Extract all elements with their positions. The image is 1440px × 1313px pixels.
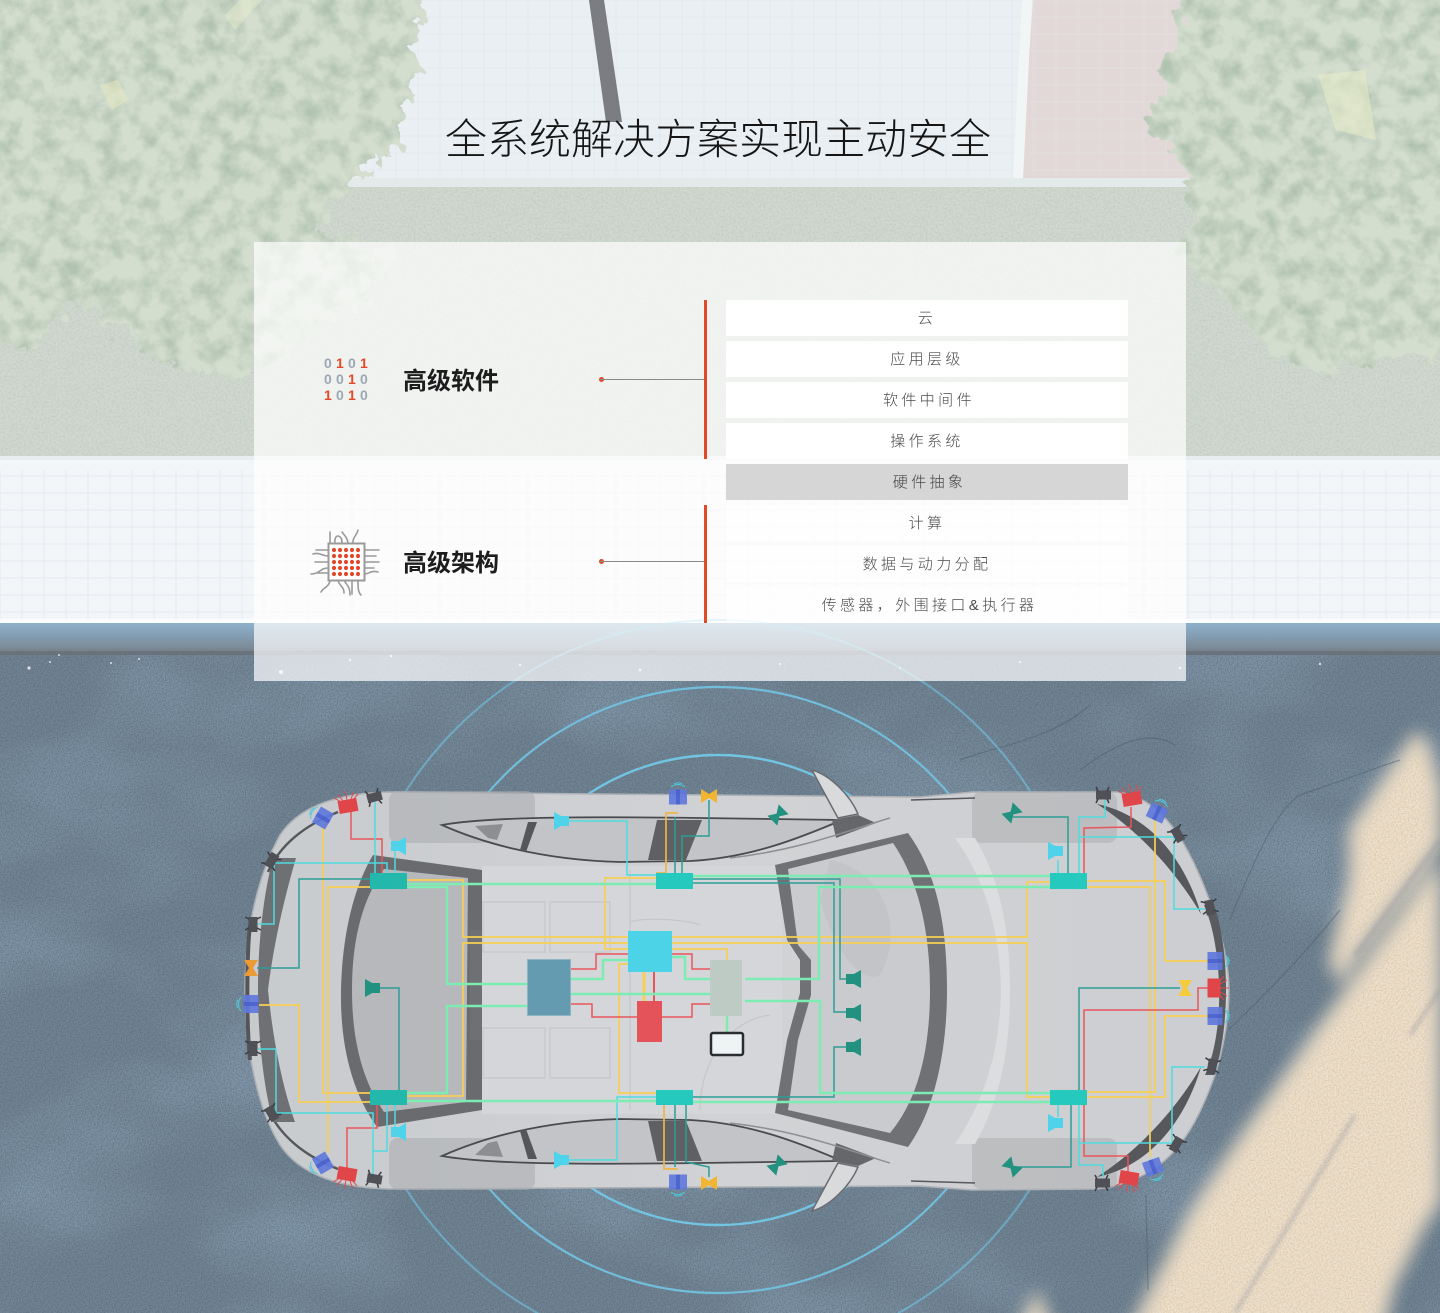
radar sensors [237, 783, 1229, 1196]
lower tiles [0, 460, 1440, 624]
display screen [711, 1033, 743, 1055]
sun patches [1015, 731, 1440, 1313]
heading: advanced architecture: 高级架构 [403, 550, 499, 577]
left tree [0, 0, 421, 378]
row: hardware abstraction: 硬件抽象 [893, 474, 966, 491]
upper paved area [0, 0, 1440, 186]
curb [0, 623, 1440, 655]
grass [0, 187, 1440, 459]
cameras [245, 787, 1221, 1191]
right tree [1150, 0, 1440, 372]
central compute: grey-green module [710, 960, 742, 1016]
signal rings [348, 620, 1088, 1313]
bracket: software [704, 300, 707, 459]
row: software middleware: 软件中间件 [883, 392, 975, 409]
car details: wheels, windows, mirrors [247, 770, 1226, 1211]
shadow streaks on sun patch [1235, 840, 1440, 1313]
zone control modules [370, 873, 1087, 1105]
row: compute [726, 505, 1128, 541]
connector: software [599, 377, 704, 382]
wiring: green data [407, 876, 1050, 1102]
central compute: blue module [528, 960, 570, 1016]
hood highlight [955, 838, 1010, 1144]
row: application layer: 应用层级 [890, 351, 964, 368]
windscreen frame [775, 833, 947, 1147]
icon: binary digits: 0010 [324, 371, 372, 387]
row: compute: 计算 [909, 515, 945, 532]
row: sensors, peripheral interfaces and actuators: 传感器，外围接口&执行器 [822, 597, 1037, 614]
actuators: yellow and orange [244, 789, 1192, 1190]
row: cloud: 云 [918, 310, 936, 327]
asphalt cracks [960, 705, 1400, 1290]
central compute: red module [637, 1001, 662, 1042]
icon: chip [310, 529, 380, 596]
wiring: teal [257, 800, 1180, 1177]
pale yellow leaves [100, 80, 128, 110]
speakers: teal [365, 802, 1023, 1178]
ultrasonic speakers: cyan [391, 812, 1063, 1169]
central compute: cyan module [628, 931, 672, 972]
panel: software and architecture stack [254, 242, 1186, 681]
asphalt [0, 652, 1440, 1313]
row: sensors, peripheral interfaces and actuators [726, 587, 1128, 623]
wiring: red [347, 807, 1208, 1172]
row: operating system: 操作系统 [890, 433, 964, 450]
rear bumper [258, 858, 296, 1122]
icon: binary digits [324, 355, 372, 403]
front bumper [1204, 905, 1226, 1075]
row: cloud [726, 300, 1128, 336]
cabin floor [482, 866, 782, 1114]
windscreen glass [788, 843, 930, 1133]
row: data and power distribution [726, 546, 1128, 582]
row: data and power distribution: 数据与动力分配 [863, 556, 991, 573]
icon: binary digits: 1010 [324, 387, 372, 403]
lidar sensors [333, 782, 1229, 1195]
connector: architecture [599, 559, 704, 564]
icon: binary digits: 0101 [324, 355, 372, 371]
rear window [341, 855, 482, 1127]
heading: advanced software: 高级软件 [403, 368, 499, 395]
bracket: architecture [704, 505, 707, 623]
lamp post [589, 0, 622, 122]
wiring: yellow power [259, 813, 1208, 1169]
row: application layer [726, 341, 1128, 377]
row: software middleware [726, 382, 1128, 418]
title: 全系统解决方案实现主动安全 [445, 116, 991, 163]
wiring: cyan [258, 800, 1205, 1177]
row: hardware abstraction [726, 464, 1128, 500]
row: operating system [726, 423, 1128, 459]
specks along the curb [27, 654, 1321, 674]
car body [245, 792, 1229, 1190]
